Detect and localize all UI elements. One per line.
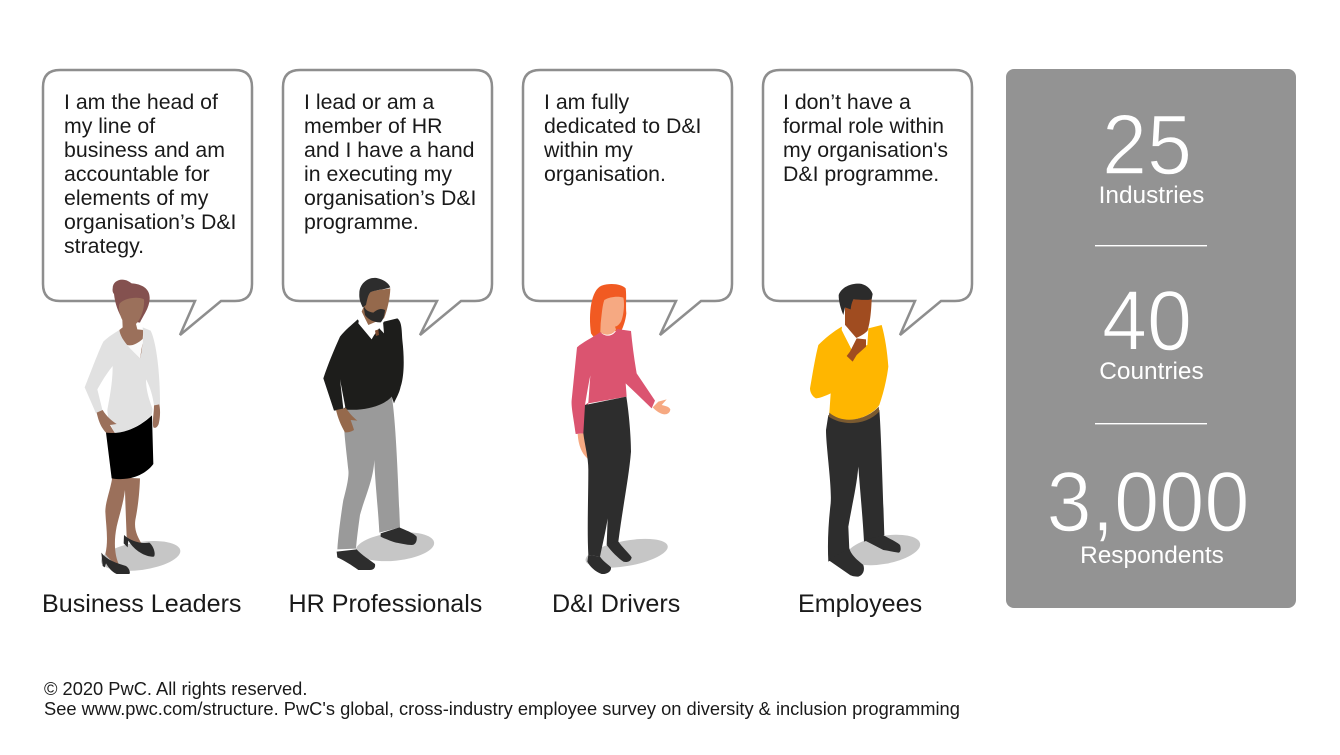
speech bubble: employees	[763, 70, 972, 335]
speech bubble: D&I drivers: I am fully	[544, 90, 630, 114]
stat: industries: Industries	[1099, 182, 1204, 209]
speech bubble: D&I drivers	[523, 70, 732, 335]
label: business leaders: Business Leaders	[42, 590, 241, 618]
speech bubble: employees: D&I programme.	[783, 162, 939, 186]
speech bubble: HR professionals: member of HR	[304, 114, 442, 138]
panel: survey statistics	[1006, 69, 1296, 608]
speech bubble: D&I drivers: within my	[543, 138, 633, 162]
speech bubble: business leaders	[43, 70, 252, 335]
speech bubble: employees: my organisation's	[783, 138, 948, 162]
speech bubble: employees: I don’t have a	[783, 90, 911, 114]
speech bubble: HR professionals: I lead or am a	[304, 90, 434, 114]
speech bubble: employees: formal role within	[783, 114, 944, 138]
figure: HR professional man	[323, 278, 436, 570]
label: HR professionals: HR Professionals	[288, 590, 482, 618]
speech bubble: HR professionals: in executing my	[304, 162, 452, 186]
speech bubble: D&I drivers: dedicated to D&I	[544, 114, 701, 138]
stat: countries: 40	[1102, 274, 1192, 369]
speech bubble: business leaders: strategy.	[64, 234, 144, 258]
speech bubble: HR professionals: and I have a hand	[304, 138, 475, 162]
stat: respondents: 3,000	[1046, 455, 1250, 550]
label: employees: Employees	[798, 590, 922, 618]
figure: D&I driver woman	[572, 284, 670, 574]
stat: respondents: Respondents	[1080, 542, 1224, 569]
stat: countries: Countries	[1099, 358, 1204, 385]
speech bubble: business leaders: accountable for	[64, 162, 210, 186]
speech bubble: business leaders: my line of	[64, 114, 155, 138]
speech bubble: business leaders: organisation’s D&I	[64, 210, 236, 234]
speech bubble: business leaders: business and am	[64, 138, 225, 162]
figure: employee man	[810, 284, 923, 577]
stat: industries: 25	[1102, 98, 1192, 193]
speech bubble: D&I drivers: organisation.	[544, 162, 666, 186]
footer: copyright and source: See www.pwc.com/structure. PwC's global, cross-industry employee survey on diversity & inclusion programming	[44, 698, 960, 719]
speech bubble: HR professionals	[283, 70, 492, 335]
speech bubble: business leaders: I am the head of	[64, 90, 218, 114]
speech bubble: HR professionals: programme.	[304, 210, 419, 234]
speech bubble: business leaders: elements of my	[64, 186, 209, 210]
speech bubble: HR professionals: organisation’s D&I	[304, 186, 476, 210]
figure: business leader woman	[85, 280, 182, 575]
label: D&I drivers: D&I Drivers	[552, 590, 680, 618]
footer: copyright and source: © 2020 PwC. All rights reserved.	[44, 678, 307, 699]
